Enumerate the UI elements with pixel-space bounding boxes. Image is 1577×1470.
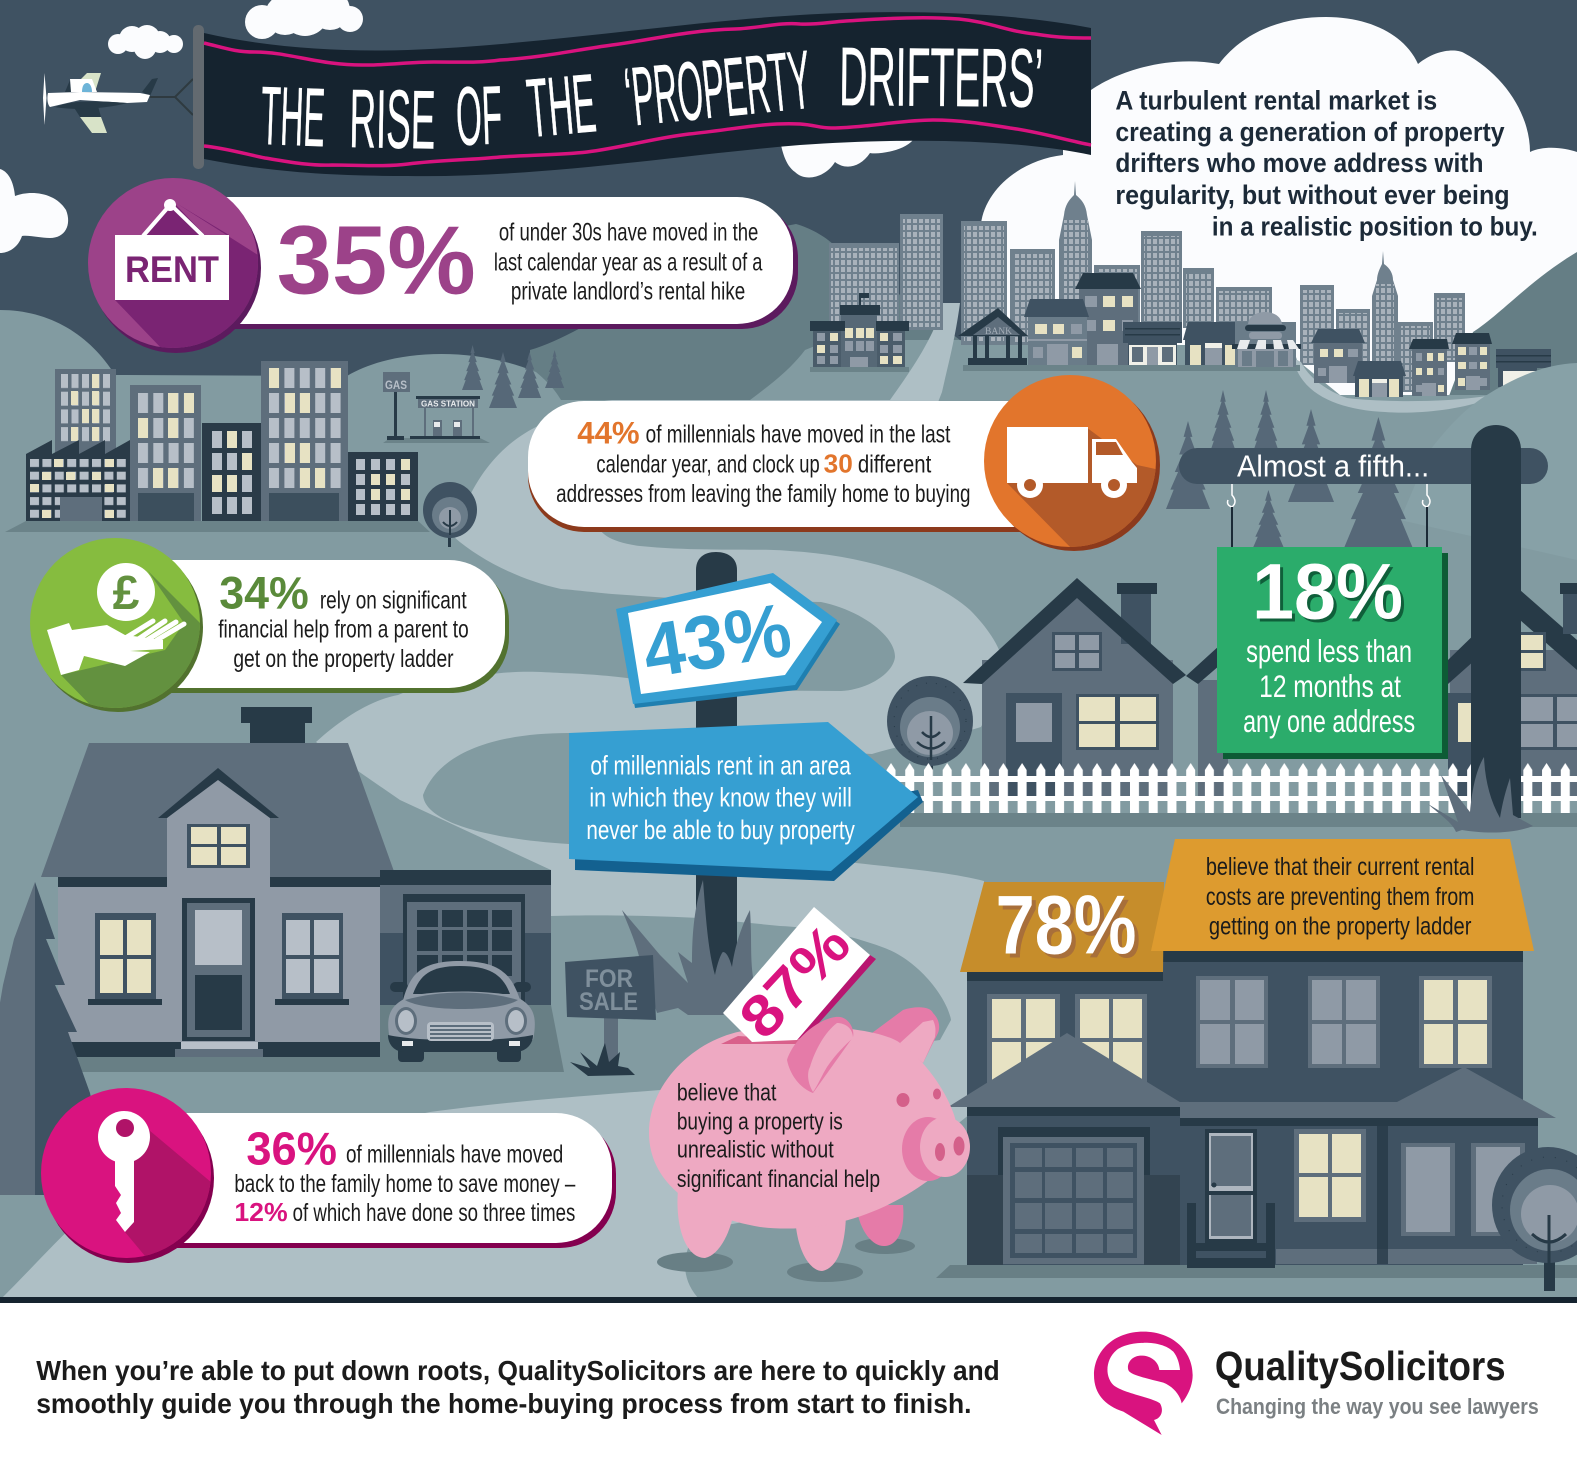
stat: 18%	[1243, 548, 1415, 739]
intro text in cloud: creating a generation of property	[1115, 116, 1505, 147]
banner: plane towing title	[43, 12, 1091, 176]
left city: gas station	[383, 372, 490, 443]
sign: blue arrow: of millennials rent in an area	[590, 749, 852, 780]
text: 36%: back to the family home to save money –	[234, 1170, 575, 1198]
left pine trees on hill	[462, 345, 564, 408]
text: 36%: 12%	[234, 1197, 288, 1227]
logo: QualitySolicitors: QualitySolicitors	[1215, 1343, 1506, 1389]
icon: truck	[1007, 427, 1137, 498]
left city: office buildings and factory	[5, 361, 430, 532]
stat: 78%	[996, 853, 1474, 975]
car	[388, 961, 535, 1062]
text: 34%: rely on significant	[320, 586, 467, 614]
stat: 78%: believe that their current rental	[1206, 853, 1474, 881]
stat: 78%: 78%	[1000, 881, 1141, 975]
for sale sign: FOR	[585, 965, 633, 993]
cloud: left edge	[0, 169, 68, 253]
panel: 35% rent pill	[88, 178, 798, 353]
title: THE	[259, 69, 327, 164]
pig text: buying a property is	[677, 1108, 843, 1135]
intro text in cloud: in a realistic position to buy.	[1212, 210, 1538, 241]
panel: 78% roof	[960, 839, 1534, 975]
round tree near city	[423, 482, 477, 547]
text: 44%	[556, 416, 971, 508]
sign: blue arrow: never be able to buy property	[586, 814, 855, 845]
background city skyline	[829, 181, 1465, 392]
left city: gas station: GAS	[385, 378, 407, 392]
cloud: under banner	[780, 140, 913, 177]
heading: almost a fifth: Almost a fifth...	[1237, 451, 1429, 484]
for sale sign	[565, 955, 656, 1076]
stat: 35%	[277, 206, 762, 315]
icon: rent sign: RENT	[125, 249, 219, 290]
icon: key	[98, 1111, 150, 1232]
grass at pole base	[622, 880, 753, 1015]
house: large left house	[41, 707, 564, 1072]
text: 34%: 34%	[219, 567, 309, 618]
icon: hand with pound coin	[47, 563, 184, 675]
stat: 78%: getting on the property ladder	[1209, 912, 1471, 940]
pig text	[677, 1079, 880, 1193]
text: 34%: get on the property ladder	[233, 645, 454, 673]
right pine trees	[1166, 390, 1413, 550]
panel: 18% green sign	[1217, 547, 1448, 759]
stat: 35%: of under 30s have moved in the	[499, 218, 758, 246]
panel: 34% hand pill	[30, 538, 509, 712]
panel: 36% key pill	[41, 1088, 616, 1263]
stat: 35%: 35%	[277, 206, 476, 315]
87% card: 87%	[727, 911, 863, 1051]
left pine tree	[0, 882, 110, 1195]
logo: QualitySolicitors	[1094, 1332, 1539, 1435]
town road branch	[1293, 358, 1487, 413]
winding road	[0, 303, 1000, 1300]
left city: gas station: GAS STATION	[421, 400, 475, 408]
title: THE	[523, 56, 599, 155]
stat: 35%: last calendar year as a result of a	[494, 249, 762, 277]
text: 44%: 44%	[577, 416, 640, 451]
bank	[958, 308, 1028, 365]
pig face	[896, 1088, 970, 1181]
logo: QualitySolicitors: Changing the way you see lawyers	[1216, 1394, 1539, 1419]
pig text: unrealistic without	[677, 1137, 834, 1164]
ground layer	[0, 310, 1577, 1300]
stat: 35%: private landlord’s rental hike	[511, 278, 745, 306]
footer text: When you’re able to put down roots, QualitySolicitors are here to quickly and	[36, 1355, 1000, 1386]
text: 44%: addresses from leaving the family home to buying	[556, 480, 971, 508]
stat: 18%: 18%	[1252, 548, 1403, 636]
title: ‘PROPERTY	[621, 33, 815, 144]
round tree by fence	[887, 676, 973, 785]
text: 36%: of which have done so three times	[293, 1199, 575, 1227]
title	[259, 30, 1044, 166]
sign: blue arrow: in which they know they will	[589, 782, 852, 813]
for sale sign: SALE	[579, 988, 638, 1016]
text: 44%: calendar year, and clock up	[596, 451, 820, 479]
signpost pole with blue signs	[569, 552, 923, 1015]
cloud: small upper left	[108, 25, 183, 59]
cloud: top right speech cloud	[980, 17, 1577, 400]
text: 44%: different	[858, 451, 931, 479]
text: 36%	[234, 1123, 575, 1227]
intro text in cloud	[1115, 85, 1538, 241]
round tree bottom right	[1492, 1147, 1577, 1291]
title: OF	[454, 68, 504, 163]
icon: rent sign	[115, 199, 229, 300]
text: 36%: of millennials have moved	[346, 1141, 563, 1169]
text: 34%: financial help from a parent to	[218, 616, 469, 644]
panel: 44% truck pill	[528, 375, 1160, 555]
garage	[380, 870, 551, 1005]
footer text	[36, 1355, 1000, 1419]
ground strip under fence	[900, 813, 1577, 827]
house: right bottom with 78% roof	[936, 839, 1577, 1278]
right foreground hill	[1400, 363, 1577, 560]
stat: 18%: any one address	[1243, 704, 1415, 739]
picket fence	[886, 763, 1577, 813]
intro text in cloud: regularity, but without ever being	[1115, 179, 1510, 210]
icon: plane	[43, 73, 193, 133]
footer panel	[0, 1297, 1577, 1470]
intro text in cloud: drifters who move address with	[1115, 147, 1483, 178]
footer text: smoothly guide you through the home-buying process from start to finish.	[36, 1388, 972, 1419]
banner: plane towing title: DRIFTERS’	[839, 30, 1044, 125]
signpost: almost a fifth	[1179, 425, 1548, 833]
town buildings row	[810, 273, 1551, 397]
stat: 18%: 18%	[1255, 551, 1406, 639]
stat: 18%: spend less than	[1246, 634, 1412, 669]
text: 34%	[218, 567, 469, 673]
bank: BANK	[985, 326, 1013, 336]
intro text in cloud: A turbulent rental market is	[1115, 85, 1437, 116]
stat: 78%: costs are preventing them from	[1206, 883, 1474, 911]
pig left ear	[787, 1017, 853, 1093]
cafe	[1232, 312, 1301, 367]
sign: 43%: 43%	[637, 587, 797, 695]
neighbourhood houses	[963, 578, 1577, 796]
sign: blue arrow	[569, 722, 923, 881]
text: 44%: of millennials have moved in the last	[646, 421, 950, 449]
stat: 78%: 78%	[996, 877, 1136, 971]
stat: 18%: 12 months at	[1259, 669, 1401, 704]
pig text: significant financial help	[677, 1166, 880, 1193]
piggy bank	[649, 907, 970, 1282]
title: RISE	[349, 72, 436, 166]
icon: hand with pound coin: £	[113, 567, 140, 620]
text: 44%: 30	[824, 449, 853, 479]
sign: 43%	[616, 573, 840, 708]
pig text: believe that	[677, 1079, 777, 1106]
cloud: top centre	[245, 0, 363, 39]
text: 36%: 36%	[246, 1123, 337, 1175]
teal hills	[530, 224, 1577, 420]
